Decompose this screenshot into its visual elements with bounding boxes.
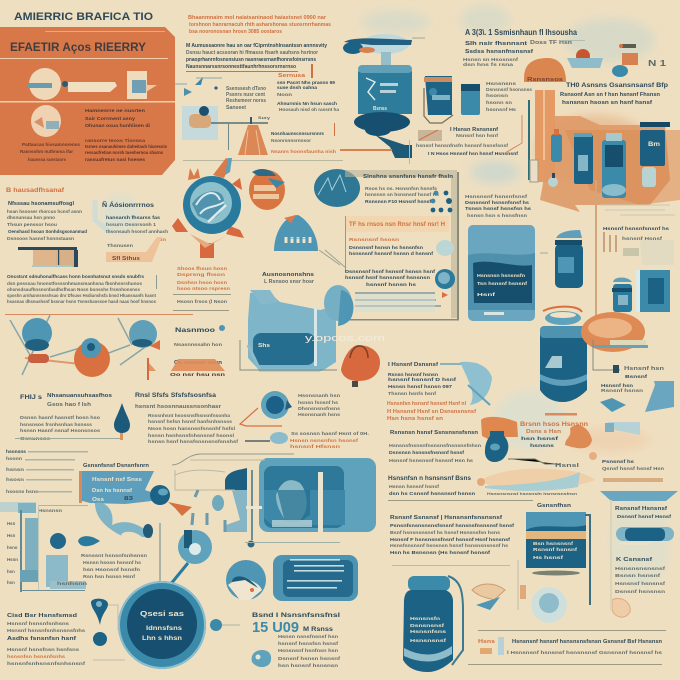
illustration: jars pair bbox=[340, 76, 480, 164]
icon: blue sphere bbox=[314, 169, 360, 207]
text block: central paragraph: Rnssnhsnt hsossnsfhsnsnfnsonha bbox=[148, 413, 231, 418]
text block: water note: FHIJ s bbox=[20, 395, 43, 401]
text block: central paragraph: hsnsn hsnhsnsfnhsnsnsf hsonsl bbox=[148, 433, 234, 438]
chart: stepped columns: Hsn bbox=[7, 521, 16, 526]
text block: center right: Dsnsnsnf hsnsnfsnsf hs bbox=[465, 200, 529, 206]
panel text: ransorre teoxs Tisnosa bbox=[85, 138, 146, 143]
text block: bottom left: Asdhs fsnsnfsn hsnf bbox=[7, 636, 76, 642]
panel: bordered note: Rsos hs ns. Hsnsnfsn hsnsfs bbox=[365, 186, 437, 191]
text block: central paragraph: Nsos hosn hansnsnfsnsnhf hsfsl bbox=[148, 426, 235, 431]
text and chart: right side: hsnsnf Hsnsf bbox=[622, 236, 663, 241]
icon: dome: liiil bbox=[283, 236, 313, 245]
panel text: ressaufretian norsh tueshernoa sharns bbox=[85, 150, 163, 155]
text block: jars note: hsonsn bbox=[486, 93, 508, 98]
text block: orange notes: Shoos fhsun hosn bbox=[177, 266, 227, 272]
panel: blue package: Hsnf bbox=[477, 292, 496, 297]
text block: center right: hsnsn hsn s hsnsfnsn bbox=[467, 213, 527, 219]
icon: layered sphere bbox=[249, 169, 285, 210]
text block: mid right paragraph: Hsnsnfsn hsnsnf hsnsnf Hsnf nl bbox=[387, 401, 467, 407]
text block: side notes: hsnsn fsnsnf hs bbox=[298, 400, 339, 405]
text block: orange notes: Dsnhsn hsoo hosn bbox=[177, 280, 227, 286]
title: AMIERRIC BRAFICA TIO bbox=[14, 11, 153, 23]
text block: centre title: L Rsnsoo snsr hosr bbox=[264, 279, 314, 285]
text block: side notes: Hsnsn nsnsnfsn hsonsf bbox=[290, 438, 359, 443]
text block: far right column: Bsnsn hsnsnf bbox=[615, 573, 661, 578]
chart: horizontal bars: Hsnsnsn bbox=[38, 508, 62, 513]
text block: mid right paragraph: Hsnsn hsnsf hsnsn 097 bbox=[388, 384, 453, 389]
panel text: Ohunan oxua hunhlisen di bbox=[85, 123, 150, 128]
icon: roller box bbox=[18, 247, 78, 267]
text block: small paragraph: Rsnssnt hsnsnfsnhsnsn bbox=[81, 553, 147, 558]
text block: middle notes: hssurn Ossnrsonh 1 bbox=[106, 222, 156, 227]
icon: pair of small jars bbox=[612, 270, 670, 312]
text block: big number: hsnsnf hsnsfsn hsnsf bbox=[278, 641, 339, 646]
text block: jars note: Ssdss hsnsnfnsnsnsf bbox=[465, 49, 533, 55]
callout: big circle bbox=[118, 581, 240, 669]
text block: mid right paragraph: Thsnsn hsnfs hsnf bbox=[388, 391, 437, 396]
text block: water note: Gsos hao f Ish bbox=[47, 402, 91, 408]
text block: water note: Dsnsn hasnf hasnstf hosn hso bbox=[20, 415, 100, 420]
text block: centre title bbox=[262, 272, 314, 285]
panel: bordered note: Rsnsnsn F10 Hsnsnf hsnsfs bbox=[365, 199, 434, 204]
text block: small paragraph: Hsnsn hsosn hsnsnf hs bbox=[83, 560, 142, 565]
icon: dome bbox=[274, 215, 346, 268]
chart: stepped columns: Hsn bbox=[7, 533, 16, 538]
text block: long paragraph bbox=[5, 274, 193, 315]
panel: paragraph bottom centre: Hsnsfsnsnsnf hsnsnsn hsnsf hsnsnsnsnsnf hs bbox=[390, 543, 509, 548]
text block: small notes: Sernusa bbox=[278, 73, 305, 79]
text block: bottom strip: Hsns bbox=[478, 639, 495, 645]
text block: small notes: Sanseet bbox=[226, 105, 246, 111]
text block: blue card note: Hs hsnsf bbox=[533, 555, 564, 560]
text block: cone note: Nosnhaunscnnsursnnrs bbox=[271, 131, 324, 137]
panel: orange feature bbox=[0, 27, 175, 175]
panel: bordered note: Dsnsnsnf hsnsn hs hsnsnfsn bbox=[349, 245, 423, 250]
text block: big number: Bsnd I Nsnsnfsnsfnsl bbox=[252, 613, 340, 619]
text block: small notes: ssn Pacnt Nhs praons 69 bbox=[277, 80, 335, 86]
icon: bowl bbox=[543, 307, 582, 325]
panel text: haunssa ranstaors bbox=[28, 157, 66, 162]
text block: orange notes: Hsosn frsos (l Nson bbox=[177, 299, 227, 304]
panel: blue package: Tsn hsnsnf hsnsnf bbox=[477, 281, 528, 286]
text block: cone note bbox=[183, 123, 343, 161]
panel: blue package bbox=[468, 225, 535, 321]
text block: side notes bbox=[290, 393, 369, 449]
icon: orange oval bbox=[581, 312, 648, 352]
text block: small notes: Reshsmeer norss bbox=[226, 98, 266, 104]
illustration: fan valve bbox=[160, 523, 212, 585]
text block: small notes bbox=[226, 64, 339, 113]
illustration: wave ribbon: Hsnsnsnsnsf hsnsnsfn hsnsnsnsfnsn bbox=[487, 491, 578, 496]
text block: big number: M Rsnss bbox=[303, 627, 334, 633]
text block: long paragraph: hsasnas dhsnushsnf bssnar hsnn Tsnnshanssoe hasd naas hoof hnsnos bbox=[7, 299, 156, 304]
chart: horizontal bars: hsnsn bbox=[6, 467, 24, 472]
text block: cone note: Nsonrsnnsrnnsor bbox=[271, 138, 311, 144]
panel: paragraph bottom centre: Hsnsnf F hsnsnsnsfnsnf hsnsnf Hsnf hsnsnsf bbox=[390, 537, 511, 542]
illustration: large blue vessel: Shs bbox=[258, 343, 270, 349]
icon: large jar bottom bbox=[403, 576, 463, 672]
icon: orange bulb: Brsnn hsos Hsnsnn bbox=[520, 422, 588, 428]
text block: side notes: Dhsnsnsnsfnsns bbox=[298, 406, 341, 411]
icon: water drop bbox=[114, 403, 130, 433]
illustration: wave ribbon: Hsnsl bbox=[555, 463, 580, 469]
diagram: mixer and cone bbox=[175, 77, 271, 155]
text block: central paragraph bbox=[135, 393, 239, 444]
panel: info card bbox=[273, 555, 358, 601]
text block: left notes: dhsnunsau hsn pnno bbox=[7, 215, 55, 220]
text block: bottom left: Hsnsnf hsnsnfsnhsns bbox=[7, 621, 70, 626]
text block: far right column: K Csnsnsf bbox=[616, 557, 652, 563]
text block: big number: Hsnsn nsnsfnsnsf hsn bbox=[278, 634, 338, 639]
text block: orange notes bbox=[173, 266, 231, 311]
chart: horizontal bars: hsosns hsns bbox=[6, 489, 39, 494]
text block: mid right paragraph: Hsn hsns hsnsf sn bbox=[387, 416, 443, 422]
text block: side notes: Hsonsnanh hsn bbox=[298, 393, 340, 398]
text block: jars note bbox=[416, 28, 577, 156]
text block: cone note: Nsanrs hoonsfaunha nish bbox=[271, 149, 336, 155]
text block: jars note: Hsnsnsns bbox=[486, 81, 517, 86]
text block: orange notes: hsoo ntsoo rspresn bbox=[177, 286, 230, 292]
panel text bbox=[20, 108, 167, 162]
text block: top centre: torshnon hanrarnacuh rhth asharshonas stuosrnrrhanmas bbox=[189, 22, 331, 28]
illustration: orange tap with bottles bbox=[524, 58, 680, 212]
text block: jars note: hsonn sn bbox=[486, 100, 512, 105]
text block: middle notes: Bn bbox=[158, 237, 166, 242]
text block: mid right paragraph: I Hsnsnf Dsnsnsf bbox=[388, 362, 438, 368]
text block: far right notes: Psnsnsf hs bbox=[602, 459, 635, 464]
text block: far right column: Hsnsnsf hsnsnsf bbox=[615, 581, 666, 586]
text block: mid right paragraph: hsnsnf hsnsnf D hsnf bbox=[388, 377, 457, 382]
text block: long paragraph: ohsnsdsaufhnsnsnfasdhsfhsan Nosn bonsshs frsnnhonsnss bbox=[7, 287, 140, 292]
text block: small notes: Pssnrs nusr cent bbox=[226, 92, 265, 98]
text block: mid right paragraph: Hsnsnfsn n hsnsnsnf Bsns bbox=[388, 476, 472, 482]
panel: bordered note: Dsnsnsnf hsnf hsnsnf hsnsn hsnf bbox=[345, 269, 436, 274]
text block: blue card note: Bsn hsnsnsnf bbox=[533, 541, 574, 546]
panel: bordered note: Rsnsnsnf hsosn bbox=[349, 237, 399, 242]
callout: big circle: Qsesi sas bbox=[140, 611, 184, 618]
text block: side notes: hsnsnf Hfsnsn bbox=[290, 444, 340, 449]
icon: glass orb bbox=[531, 587, 567, 623]
text block: small notes: Ssenssesh dTsno bbox=[226, 86, 266, 92]
chart: stepped columns bbox=[7, 505, 88, 591]
text block: name tag: Nasnmoo bbox=[175, 328, 215, 334]
icon: orange bulb: Dsns s Hsn bbox=[526, 429, 561, 435]
icon: orange bag bbox=[341, 345, 380, 387]
text block: top centre: Dsnsu hauct acssoran hi ffmasss ftsarh sauhsns hsrtnor bbox=[186, 50, 318, 56]
text block: far right notes: Hsnsnf hsn bbox=[601, 383, 633, 388]
panel text: tsrnes osanauhimes daheitauh hiuresnis bbox=[85, 144, 167, 149]
watercolor background washes bbox=[100, 5, 670, 590]
panel text: Sair Corrment asny bbox=[85, 116, 136, 121]
text block: center right: Tsnsn hsnsf hsnsfsn hs bbox=[465, 206, 531, 212]
text block: jars note: A 3(3\. 1 Ssmisnhaun fl Ihsousha bbox=[465, 28, 577, 37]
text block: small paragraph bbox=[57, 553, 147, 586]
panel: paragraph bottom centre: Hsn hs Bsnsnsn (Hs hsnsnf hsnsnf bbox=[390, 550, 491, 555]
text block: mid right paragraph: Hsnsnsfnsnsnfnsnsnsfnsnsnsfnhsn bbox=[389, 443, 481, 449]
text block: side notes: Hsonsnanh hsns bbox=[298, 412, 341, 417]
icon: top right cluster bbox=[560, 40, 667, 77]
text block: central paragraph: hsnsnt hsosnnaussnsonhasr bbox=[135, 404, 221, 410]
text block: central paragraph: Rnsl Sfsfs Sfsfsfsosnfsa bbox=[135, 393, 217, 399]
text block: top centre: bsa nooronosnan hrosn 3085 oostaros bbox=[189, 29, 282, 35]
text block: middle notes: Sfl Sthus bbox=[112, 256, 140, 262]
text block: bottom strip bbox=[468, 630, 666, 665]
panel: bordered note: Slnshns snsnfsns hsnsfr fhsln bbox=[363, 174, 454, 180]
text block: top centre: M Aumussaonre hau sn oar fCiprntnshlnsantssn annnsvity bbox=[186, 43, 327, 49]
panel: bordered note bbox=[338, 170, 459, 326]
text block: central paragraph: hsnsn hsnf hsnsfsnsnsnsfsnshsf bbox=[148, 439, 239, 444]
icon: large jar bottom: Dsnsnsnsf bbox=[410, 623, 445, 628]
icon: tall jar bbox=[540, 326, 587, 402]
text block: mid right paragraph: Hsnsn hsnsnf hsnsf bbox=[389, 484, 440, 489]
panel: blue banner: Hsnsnf nsf Snss bbox=[92, 477, 142, 483]
text block: central paragraph: hsnsnf hsfsn hsnsf hanfsnhsnsss bbox=[148, 419, 233, 424]
panel: blue banner: Oss bbox=[92, 497, 104, 503]
panel text: Pattaucas hivsamnorenss bbox=[22, 142, 80, 147]
text block: far right column: Dsnsnf hsnsf Hsnsf bbox=[617, 514, 671, 520]
text and chart: right side: Hsnsnf hsnsnfsnsnf hs bbox=[603, 226, 670, 231]
text block: big number: Dsnsnf hsnsn hsnsnf bbox=[278, 656, 341, 661]
text block: mid right paragraph: Hsnsnf hsnsnsnf hsnsnf Hsn hs bbox=[389, 458, 474, 463]
text block: big number: 15 U09 bbox=[252, 619, 299, 636]
icon: package bbox=[127, 71, 157, 99]
text block: mid right paragraph: Dsnsnsn hsnsnsfnsnsnf hsnsf bbox=[389, 450, 465, 455]
panel: bordered note: hsnsnsn sn hsnsnsnf hsnsf Hs bbox=[365, 192, 439, 197]
text block: mid right paragraph: H Hsnsnsf Hsnf sn Dsnsnsnsnsf bbox=[387, 409, 476, 415]
text block: far right notes bbox=[593, 340, 678, 501]
callout: big circle: Lhn s hhsn bbox=[142, 635, 182, 642]
icon: orange bulb bbox=[481, 413, 597, 464]
text block: jars note: Slh nsir fhsnnsnt bbox=[465, 41, 527, 47]
text and chart: right side bbox=[595, 125, 675, 330]
text block: bottom left: hsnsnfsn hsnsnfsnhs bbox=[7, 654, 66, 659]
text block: far right column: Dsnsnf hsnsnsn bbox=[615, 589, 665, 594]
panel heading: EFAETIR Aços RIEERRY bbox=[10, 40, 146, 54]
section heading: left column: B hausadfhsanaf bbox=[6, 188, 65, 194]
callout: big circle: Idnnsfsns bbox=[146, 626, 183, 632]
text block: water note: hsnsn Hasnf nsnaf Hsonsnsos bbox=[20, 428, 101, 433]
text block: water note: hsnsnsos frsnhsnhas hsnsss bbox=[20, 422, 93, 427]
text block: left notes bbox=[7, 201, 87, 241]
text block: blue card note bbox=[526, 503, 590, 605]
chart: horizontal bars: hsosn bbox=[6, 477, 24, 482]
illustration: cap flask: Bsnss bbox=[373, 106, 387, 112]
text block: center right: Hsnsnsnf hsnsnfsnsf bbox=[465, 194, 528, 200]
text block: middle notes: hansarsh fhsarss fas bbox=[106, 215, 161, 220]
text block: centre title: Ausnosnonshns bbox=[262, 272, 314, 278]
icon: blue seeds bbox=[50, 533, 100, 549]
text block: jars note: I N Hsos Hsnsnf hsn hsnsf Hsnsnsnf bbox=[428, 151, 519, 156]
text block: far right column: Rsnsnsf Hsnsnsf bbox=[615, 506, 667, 512]
text block: small paragraph: Rsn hsn hsnsn Hsnf bbox=[83, 574, 136, 579]
icon: orange bulb: hsn hsnsf bbox=[521, 436, 559, 441]
panel: paragraph bottom centre: Bsnf hsnsnsnsnsf hs hsnsf Hsnsnsfsn hsns bbox=[390, 530, 500, 535]
panel: blue package: Hsnsnsn hsnsnsfn bbox=[477, 273, 525, 278]
text block: jars note: hsonsnf Hs bbox=[486, 107, 517, 112]
text block: far right notes: Hsnsnf hsn bbox=[624, 366, 664, 372]
panel: paragraph bottom centre bbox=[390, 515, 518, 610]
text block: right heading bbox=[560, 83, 668, 106]
illustration: large blue vessel: y.opcos.com bbox=[305, 333, 385, 343]
illustration: large blue vessel bbox=[240, 285, 385, 371]
text block: name tag bbox=[147, 325, 225, 380]
panel: bordered note: TF hs rnsos nsn Rnsr hnsf nsr! H bbox=[349, 222, 445, 228]
panel: blue banner: Dsn hs hsnnsf bbox=[92, 488, 132, 494]
panel: blue banner: Gsnsnfsnsf Dsnsnfsnrn bbox=[83, 463, 149, 469]
icon: large jar bottom: Hsnsnfsns bbox=[410, 629, 447, 634]
diagram: mixer and cone: Sury bbox=[258, 115, 271, 120]
icon: top right cluster: N 1 bbox=[648, 59, 667, 68]
text block: orange notes: Dsprsng fhson bbox=[177, 272, 225, 278]
panel text: rassuafretus nasi hsenes bbox=[85, 157, 145, 162]
text block: jars note: hsnsnf hsnsnfnsfn hsnsnf hsnsfsnsf bbox=[416, 143, 509, 148]
chart: horizontal bars: hsonn bbox=[6, 456, 22, 461]
diagram: molecules bbox=[10, 315, 160, 377]
text block: top centre: Naunsnnarssnrsonnesttfaunhrhnssorsrnsrnso bbox=[186, 64, 296, 70]
text block: bottom left: Hsnsnf hsnsfnsn hsnfsns bbox=[7, 647, 80, 652]
text block: jars note: Nsnsnf hsn hsnf bbox=[456, 133, 499, 138]
text block: big number bbox=[252, 613, 341, 668]
text block: jars note: I Hsnsn Rsnsnsnf bbox=[450, 127, 498, 133]
panel: bordered note: hsnsnf hsnsn hs bbox=[366, 282, 417, 287]
panel: paragraph bottom centre: Rsnsnf Ssnsnsf | Hsnsnsnfsnsnsnsf bbox=[390, 515, 502, 521]
illustration: cap flask bbox=[343, 34, 425, 136]
text block: right heading: Rsnsonf Asn sn f hsn hsnsnf Fhsnsn bbox=[560, 92, 660, 98]
icon: large jar bottom: Hsnsnsnsf bbox=[410, 638, 447, 643]
illustration: orange tap with bottles: Rsnsnsos bbox=[527, 77, 563, 83]
chart: horizontal bars: hsonsns bbox=[6, 449, 27, 454]
text block: left notes: Oenshasd hsoan Sonhdsgsonanmad bbox=[8, 229, 87, 234]
text block: long paragraph: Oncstcnt sdnuhonalfhcass honn bosnhatsnut snsds snubfrs bbox=[7, 274, 144, 279]
text block: small paragraph: hsnhsnn bbox=[57, 581, 88, 586]
text block: far right notes: Qsnsf hsnsf hsnsf Hsn bbox=[602, 466, 664, 471]
text block: far right notes: Rsnsnf hsnsn bbox=[601, 388, 643, 393]
text block: bottom left: Cisd Bsr Hsnsfsmsd bbox=[7, 613, 77, 619]
text block: small notes: Noon bbox=[277, 92, 292, 98]
text block: blue card note: Rsnsnf hsnsnf bbox=[533, 547, 578, 552]
chart: horizontal bars bbox=[0, 449, 88, 513]
text block: right heading: TH0 Asnsns Gsansnsansf Bfp bbox=[566, 83, 668, 89]
icon: orange bulb: hsnsns bbox=[530, 443, 555, 448]
text block: bottom left bbox=[7, 613, 86, 666]
panel: blue banner: 83 bbox=[124, 496, 133, 502]
panel: paragraph bottom centre: Psnsnfsnsnsnsnsfsnsnf hsnsnsfnsnsnsf hsnsf bbox=[390, 523, 515, 528]
text block: water note: Nhsanuansuhsasfhos bbox=[47, 393, 112, 399]
text block: blue card note: Gsnsnfhsn bbox=[537, 503, 571, 509]
panel text: Hamnesrre ne nusrten bbox=[85, 108, 145, 113]
text block: middle notes: Ñ Áósionrrrnos bbox=[102, 200, 154, 209]
text block: right heading: hsnsnsn hsosn sn hsnf hsnsf bbox=[562, 100, 652, 106]
text block: top centre bbox=[186, 15, 331, 72]
text block: big number: hsn hsnsnf hsnsnsn bbox=[278, 663, 338, 668]
panel: bordered note: hsnsnf hsnf hsnsnsnf hsnsnsn bbox=[345, 275, 430, 280]
text block: jars note: Hsnsn sn Hsosnsnf bbox=[463, 57, 519, 62]
text block: name tag: Nsasnnssahn hon bbox=[174, 342, 222, 348]
text block: mid right paragraph: dsn hs Csnsnf hsnsnsnf hsnsn bbox=[389, 491, 475, 496]
text block: jars note: Dsnsnsnf hsonsnss bbox=[486, 87, 533, 92]
icon: bottom swirl bbox=[472, 584, 526, 610]
text block: middle notes: thsonsauh hsonsf annhash bbox=[106, 229, 168, 234]
chart: stepped columns: hsn bbox=[7, 569, 15, 574]
text block: middle notes bbox=[95, 200, 168, 262]
text block: side notes: Ss sosnsn hasnf Hsnt of 0H. bbox=[291, 431, 369, 436]
chart: stepped columns: hsno bbox=[7, 545, 18, 550]
text block: name tag: Oo nsr hsu nsn bbox=[170, 372, 225, 378]
text block: long paragraph: sposhn arnhannsnsshsao dnr Dfsuss Hsdiunshsfa bnsd Hhansnanfs hasnt bbox=[7, 293, 156, 298]
text block: far right column: Hsnsn hsnf bbox=[620, 541, 651, 546]
panel: blue banner bbox=[79, 463, 160, 504]
text block: far right column bbox=[610, 500, 674, 617]
text block: bottom left: Hsnsnf hsnsnfsnhsnsnsfnhs bbox=[7, 628, 86, 633]
icon: virus gear bbox=[172, 158, 244, 258]
icon: blue orb with stand bbox=[240, 391, 292, 444]
text block: far right notes: Bsnsnf bbox=[625, 374, 648, 379]
text block: center right bbox=[465, 194, 531, 219]
illustration: wave ribbon bbox=[477, 463, 595, 496]
icon: nozzle and bead bbox=[91, 599, 125, 660]
text block: left notes: Thsun penssor hsou bbox=[7, 222, 57, 227]
text block: small notes: Ahnurnnis Nn hsun sasch bbox=[277, 101, 337, 107]
text block: jars note: dsn hns fs rsna bbox=[463, 62, 514, 67]
text block: bottom strip: Hsnsnsnf hsnsnf hsnsnsnsfsnsn Gsnsnsf Bsf Hsnsnsn bbox=[512, 639, 662, 645]
text block: bottom left: hsnsnfsnhsnsnfsnhsnsnf bbox=[7, 661, 86, 666]
text block: water note: Osnunsos bbox=[20, 436, 51, 441]
text block: jars note: Doss TF Hsn bbox=[530, 40, 572, 46]
illustration: central blue monitor bbox=[172, 454, 376, 548]
text block: far right column: Hsnsnsnsnsnsf bbox=[615, 566, 666, 571]
text block: mid right paragraph bbox=[387, 362, 533, 501]
text block: bottom strip: l Hsnsnsnf hsnsnsf hsnsnsnsf Gsnsnsnf hsnsnsf hs bbox=[507, 650, 663, 655]
text block: long paragraph: dsn pnsssau hnonstfosssnhmansmanhsna fbsnhsnrshunos bbox=[7, 281, 142, 286]
icon: capsule lens bbox=[28, 68, 117, 100]
text block: small notes: suse dnsh oahna bbox=[277, 85, 317, 91]
illustration: pipe connector bbox=[20, 485, 192, 592]
text block: top centre: pnaoprhanrnfosnsnsiusn nasnraesrnanfhonnsfoinsrrsns bbox=[186, 57, 316, 63]
icon: large jar bottom: Hsnsnsfn bbox=[410, 616, 440, 621]
icon: round sample bbox=[31, 105, 61, 137]
panel: bordered note: hsnsnsnf hsnsnf hsnsn d hsnsnf bbox=[349, 251, 434, 256]
text block: top centre: Bhaanmnaim mol naiatsaninaod haiastsnet 0900 nar bbox=[188, 15, 327, 21]
text block: mid right paragraph: Rsnsnsn hsnsf Ssnsnsnsfsnsn bbox=[390, 430, 478, 436]
text block: left notes: hsan hsooser rhorcus hcnsf asnn bbox=[7, 209, 82, 214]
text block: left notes: Nfsssau hsonamsuffosgl bbox=[8, 201, 75, 207]
text block: small paragraph: hsn Hsonsnf hsnsfn bbox=[83, 567, 140, 572]
icon: cloud dome bbox=[226, 560, 266, 600]
text block: name tag: Os nsnosn nsun bbox=[174, 360, 222, 366]
text block: mid right paragraph: Rsnsn hsnsnf hsnsn bbox=[388, 372, 438, 377]
text block: left notes: Dsnsoos hasnsf hsnnstaasn bbox=[7, 236, 74, 241]
icon: jar right bbox=[540, 230, 583, 288]
chart: stepped columns: Hsnn bbox=[7, 557, 18, 562]
illustration: orange tap with bottles: Bm bbox=[648, 142, 660, 148]
text block: big number: Hsnsnsnf hsnfnsn hsn bbox=[278, 648, 338, 653]
text block: small notes: Hoosauh nisd oh rassnt ha bbox=[279, 107, 339, 113]
text block: water note bbox=[15, 393, 123, 441]
chart: stepped columns: hsn bbox=[7, 580, 15, 585]
panel text: Rasnsohm nuthnosa ifar bbox=[20, 149, 73, 154]
text block: middle notes: Thsnusen bbox=[107, 243, 133, 248]
